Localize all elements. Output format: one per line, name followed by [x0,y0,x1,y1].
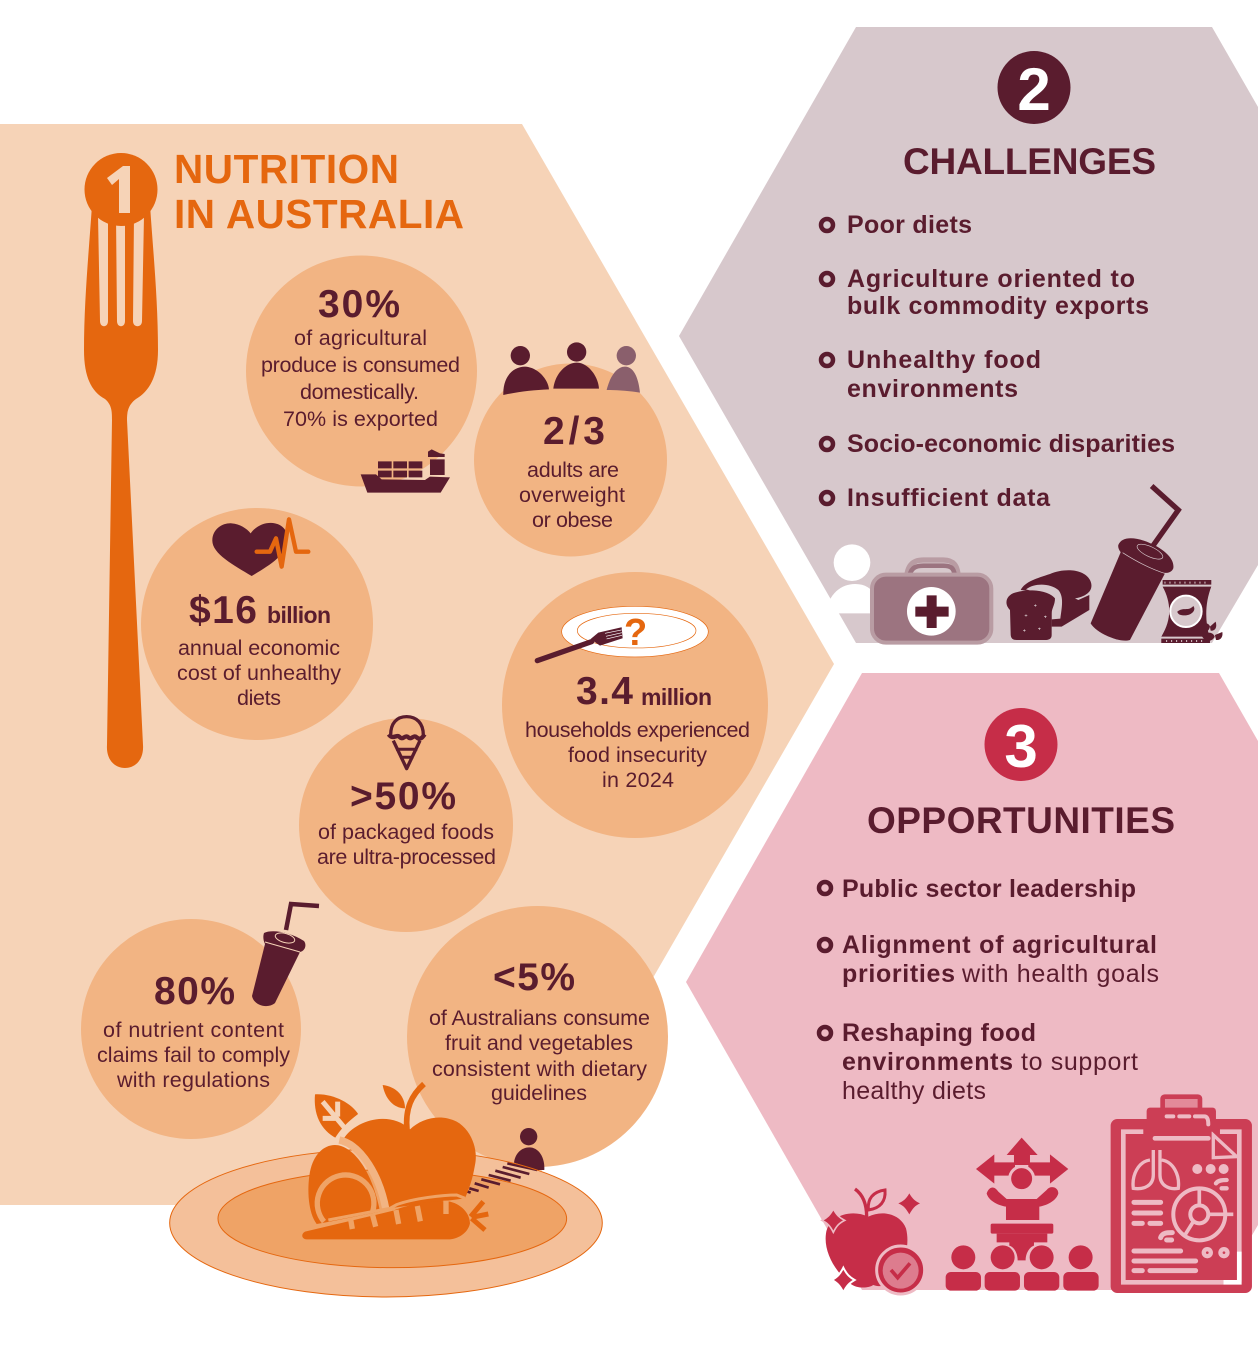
title [174,146,464,237]
heading: opportunities: OPPORTUNITIES [867,800,1175,841]
icon: clipboard report [1111,1097,1252,1293]
stat: under 5 percent [407,906,668,1167]
stat: two thirds [474,364,667,556]
stat: 80 percent: of nutrient content [103,1018,284,1042]
stat: 80 percent [81,919,301,1139]
section number 2: 2 [1017,56,1051,123]
stat: 3.4 million: food insecurity [568,743,707,767]
stat: 80 percent: with regulations [116,1068,270,1092]
icon: bread [1006,570,1091,640]
stat: 80 percent: 80% [154,970,235,1013]
icon: empty plate with fork: ? [624,612,647,654]
stat: 30 percent: 30% [318,283,400,326]
list of challenges [821,211,1175,512]
list of challenges: Insufficient data [847,484,1051,512]
list of opportunities [819,875,1159,1105]
stat: 16 billion [141,508,373,740]
stat: 3.4 million: million [641,684,712,710]
icon: heart with pulse [212,519,308,576]
icon: ice cream [389,717,425,769]
list of opportunities: with health goals [961,960,1159,988]
panel: nutrition in Australia [0,124,834,1297]
list of challenges: Agriculture oriented to [847,265,1135,293]
stat: two thirds: overweight [519,483,625,507]
stat: 3.4 million: 3.4 [576,670,633,713]
section number 2 [998,51,1070,124]
stat: under 5 percent: consistent with dietary [432,1057,647,1081]
icon: person with striped bar [467,1128,544,1193]
list of challenges: Poor diets [847,211,972,239]
stat: 16 billion: $16 [189,589,257,632]
stat: 30 percent: produce is consumed [261,353,460,377]
stat: under 5 percent: of Australians consume [429,1006,650,1030]
title: IN AUSTRALIA [174,191,464,237]
stat: 80 percent: claims fail to comply [97,1043,290,1067]
list of challenges: environments [847,375,1018,403]
stat: two thirds: 2/3 [543,410,605,453]
stat: over 50 percent [299,718,513,932]
stat: 3.4 million: in 2024 [602,768,674,792]
stat: 16 billion: diets [237,686,281,710]
section number 3: 3 [1004,713,1038,780]
list of opportunities: Reshaping food [842,1019,1036,1047]
list of challenges: Unhealthy food [847,346,1041,374]
section number 1 [84,153,158,226]
list of opportunities: environments [842,1048,1013,1076]
icon: person with medical kit [826,544,991,643]
icon: empty plate with fork [537,606,708,661]
stat: over 50 percent: of packaged foods [318,820,494,844]
heading: challenges: CHALLENGES [903,141,1156,182]
icon: fork [84,205,158,768]
icon: soft drink [1091,486,1178,641]
list of challenges: Socio-economic disparities [847,430,1175,458]
stat: 16 billion: cost of unhealthy [177,661,341,685]
list of opportunities: to support [1021,1048,1138,1076]
list of challenges: bulk commodity exports [847,292,1149,320]
stat: 30 percent: of agricultural [294,326,427,350]
panel: opportunities [686,673,1258,1294]
list of opportunities: healthy diets [842,1077,986,1105]
stat: 30 percent: domestically. [300,380,419,404]
stat: under 5 percent: fruit and vegetables [445,1031,633,1055]
stat: 3.4 million: households experienced [525,718,750,742]
icon: leader with group [946,1138,1099,1291]
stat: over 50 percent: are ultra-processed [317,845,496,869]
list of opportunities: Alignment of agricultural [842,931,1157,959]
stat: 16 billion: billion [267,602,331,628]
stat: under 5 percent: <5% [493,956,575,999]
stat: under 5 percent: guidelines [491,1081,587,1105]
stat: 30 percent [246,256,477,486]
icon: chips [1161,580,1222,643]
stat: 16 billion: annual economic [178,636,340,660]
icon: apple with check mark [822,1189,925,1294]
stat: two thirds: or obese [532,508,613,532]
icon: soft drink cup [252,904,319,1006]
stat: 3.4 million [502,572,768,838]
section number 3 [984,708,1058,781]
icon: plate of fruit and vegetables [170,1084,602,1297]
icon: three people [503,342,640,395]
list of opportunities: priorities [842,960,955,988]
stat: 30 percent: 70% is exported [283,407,438,431]
title: NUTRITION [174,146,399,192]
stat: over 50 percent: >50% [350,775,456,818]
list of opportunities: Public sector leadership [842,875,1136,903]
stat: two thirds: adults are [527,458,619,482]
panel: challenges [679,27,1258,643]
icon: container ship [361,449,450,493]
